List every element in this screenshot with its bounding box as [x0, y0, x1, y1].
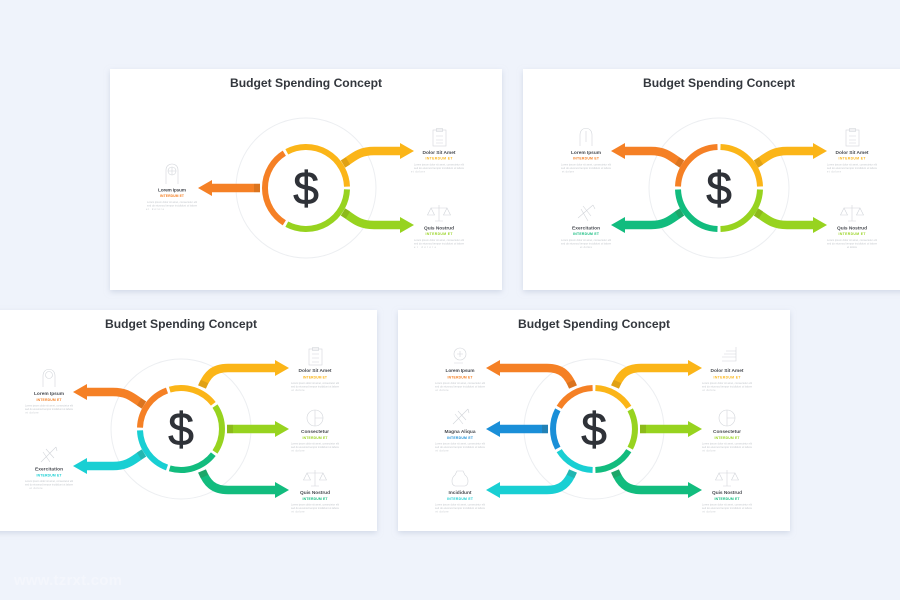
- icon: rocket: [578, 205, 595, 221]
- text block: bottom right: et dolore: [292, 510, 305, 514]
- text block: top right: sed do eiusmod tempor incididunt ut labore: [702, 386, 753, 388]
- text block: bottom right: INTERDUM ET: [426, 232, 453, 236]
- icon: rocket: [453, 409, 469, 424]
- text block: bottom right: Lorem ipsum dolor sit amet, consectetur elit: [702, 504, 752, 506]
- text block: top right: sed do eiusmod tempor incididunt ut labore: [414, 167, 465, 170]
- text block: top right: [702, 368, 753, 392]
- heading: Budget Spending Concept: [230, 76, 382, 90]
- text block: left: et dolore: [146, 208, 165, 211]
- text block: top right: Lorem ipsum dolor sit amet, consectetur elit: [414, 164, 464, 166]
- text block: top left: Lorem Ipsum: [34, 391, 64, 397]
- text block: middle right: INTERDUM ET: [302, 436, 328, 440]
- text block: bottom left: Lorem ipsum dolor sit amet, consectetur elit: [561, 239, 611, 242]
- arrow: green: [202, 471, 289, 498]
- arrow: lime: [227, 421, 289, 437]
- heading: Budget Spending Concept: [518, 317, 670, 331]
- text block: left: Lorem Ipsum: [158, 188, 186, 194]
- text block: middle right: Lorem ipsum dolor sit amet, consectetur elit: [291, 442, 339, 446]
- text block: bottom right: INTERDUM ET: [302, 497, 328, 501]
- text block: bottom left: sed do eiusmod tempor incididunt ut labore: [25, 484, 74, 486]
- text block: top right: INTERDUM ET: [714, 376, 741, 380]
- panel: three-arrow concept: [110, 69, 502, 290]
- text block: middle right: et dolore: [292, 450, 305, 452]
- text block: top right: Dolor Sit Amet: [422, 150, 456, 156]
- ring: [553, 388, 635, 470]
- icon: clipboard: [309, 348, 322, 365]
- text block: bottom left: et dolore: [30, 487, 43, 490]
- arrow: yellow: [756, 143, 827, 164]
- arrow: teal: [611, 212, 682, 233]
- text block: bottom right: sed do eiusmod tempor incididunt ut labore: [291, 507, 340, 510]
- text block: top right: Dolor Sit Amet: [298, 368, 332, 374]
- icon: head: [580, 128, 592, 146]
- arrow: orange: [73, 384, 144, 405]
- text block: top left: [561, 150, 612, 174]
- icon: head: [454, 348, 466, 363]
- text block: bottom right: Lorem ipsum dolor sit amet, consectetur elit: [827, 239, 877, 242]
- watermark: www.tzrxt.com: [13, 572, 122, 589]
- text block: middle right: [291, 429, 340, 452]
- text block: top left: Lorem ipsum dolor sit amet, consectetur elit: [435, 382, 485, 385]
- arrow: lime: [640, 421, 702, 437]
- icon: rocket: [41, 447, 57, 462]
- text block: top right: Dolor Sit Amet: [710, 368, 744, 374]
- arrow: yellow: [343, 143, 414, 164]
- text block: bottom left: Incididunt: [448, 490, 472, 496]
- text block: bottom right: sed do eiusmod tempor incididunt ut labore: [414, 242, 465, 246]
- text block: top left: INTERDUM ET: [573, 156, 600, 160]
- text block: top right: INTERDUM ET: [303, 376, 328, 380]
- icon: scales: [428, 205, 450, 221]
- text block: bottom right: Lorem ipsum dolor sit amet, consectetur elit: [414, 239, 464, 242]
- icon: clipboard: [433, 128, 446, 146]
- arrow: orange: [198, 180, 260, 196]
- dollar icon: $: [293, 162, 319, 214]
- ring: [265, 147, 347, 229]
- text block: top left: INTERDUM ET: [448, 376, 473, 380]
- text block: middle right: INTERDUM ET: [714, 436, 740, 440]
- text block: top right: sed do eiusmod tempor incididunt ut labore: [827, 167, 878, 170]
- ring: [678, 147, 760, 229]
- text block: left: [146, 188, 198, 211]
- text block: top right: et dolore: [702, 389, 716, 392]
- text block: top left: et dolore: [436, 389, 449, 392]
- icon: clipboard: [846, 128, 859, 146]
- text block: top right: Lorem ipsum dolor sit amet, consectetur elit: [827, 164, 877, 166]
- arrow: yellow: [615, 360, 702, 387]
- text block: top right: INTERDUM ET: [838, 156, 866, 160]
- text block: bottom right: INTERDUM ET: [838, 232, 866, 236]
- arrow: green: [343, 212, 414, 233]
- text block: bottom left: Exercitation: [35, 466, 63, 472]
- text block: top left: et dolore: [562, 170, 575, 174]
- text block: bottom right: et dolore: [414, 246, 437, 249]
- text block: bottom left: INTERDUM ET: [447, 497, 474, 501]
- text block: bottom left: [435, 490, 486, 514]
- text block: bottom left: [25, 466, 74, 490]
- arrow: orange: [611, 143, 682, 164]
- text block: bottom right: sed do eiusmod tempor incididunt ut labore: [702, 507, 753, 510]
- text block: top right: et dolore: [411, 170, 426, 174]
- panel: five-arrow concept: [0, 310, 377, 531]
- icon: head: [43, 369, 55, 387]
- text block: bottom right: et dolore: [847, 246, 858, 249]
- text block: bottom left: sed do eiusmod tempor incididunt ut labore: [561, 242, 612, 246]
- text block: top left: Lorem Ipsum: [571, 150, 601, 156]
- text block: top right: Lorem ipsum dolor sit amet, consectetur elit: [702, 382, 752, 385]
- text block: middle left: et dolore: [436, 450, 449, 452]
- icon: pie chart: [719, 410, 735, 426]
- text block: middle right: sed do eiusmod tempor incididunt ut labore: [291, 446, 340, 449]
- text block: bottom right: [414, 226, 465, 249]
- dollar icon: $: [168, 403, 194, 455]
- text block: middle left: Magna Aliqua: [444, 429, 476, 435]
- icon: money bag: [452, 471, 468, 486]
- heading: Budget Spending Concept: [643, 76, 795, 90]
- text block: middle left: Lorem ipsum dolor sit amet, consectetur elit: [435, 442, 485, 446]
- text block: bottom right: [827, 226, 878, 249]
- text block: top left: Lorem ipsum dolor sit amet, consectetur elit: [25, 404, 73, 408]
- text block: top right: et dolore: [292, 389, 305, 392]
- text block: bottom right: Quis Nostrud: [837, 226, 867, 232]
- text block: middle right: sed do eiusmod tempor incididunt ut labore: [702, 446, 753, 449]
- text block: top left: [435, 368, 486, 392]
- text block: top left: sed do eiusmod tempor incididunt ut labore: [561, 167, 612, 170]
- text block: middle right: Lorem ipsum dolor sit amet, consectetur elit: [702, 442, 752, 446]
- ring: [140, 388, 222, 470]
- arrow: green: [615, 471, 702, 498]
- arrow: blue: [486, 421, 548, 437]
- arrow: green: [756, 212, 827, 233]
- text block: top left: et dolore: [26, 412, 39, 414]
- text block: middle right: Consectetur: [301, 429, 329, 435]
- text block: bottom right: Quis Nostrud: [712, 490, 742, 496]
- text block: left: sed do eiusmod tempor incididunt ut labore: [147, 204, 198, 208]
- text block: bottom right: [291, 490, 340, 514]
- text block: top left: INTERDUM ET: [36, 398, 62, 402]
- text block: top right: INTERDUM ET: [426, 156, 453, 160]
- panel: six-arrow concept: [398, 310, 790, 531]
- text block: bottom left: et dolore: [580, 246, 593, 249]
- text block: top left: sed do eiusmod tempor incididunt ut labore: [435, 386, 486, 388]
- icon: scales: [840, 205, 864, 221]
- text block: bottom right: Quis Nostrud: [300, 490, 330, 496]
- text block: middle right: [702, 429, 753, 452]
- text block: top left: sed do eiusmod tempor incididunt ut labore: [25, 408, 74, 411]
- text block: middle left: INTERDUM ET: [447, 436, 474, 440]
- text block: top left: Lorem Ipsum: [446, 368, 474, 374]
- dollar icon: $: [581, 403, 607, 455]
- text block: bottom left: [561, 226, 612, 249]
- text block: top right: [411, 150, 465, 174]
- icon: head: [166, 164, 178, 184]
- text block: middle left: sed do eiusmod tempor incididunt ut labore: [435, 446, 486, 449]
- text block: bottom left: et dolore: [436, 510, 449, 514]
- text block: bottom right: Lorem ipsum dolor sit amet, consectetur elit: [291, 504, 339, 506]
- text block: bottom right: INTERDUM ET: [714, 497, 740, 501]
- text block: middle right: et dolore: [702, 450, 716, 452]
- text block: bottom left: sed do eiusmod tempor incididunt ut labore: [435, 507, 486, 510]
- dollar icon: $: [706, 162, 732, 214]
- text block: left: Lorem ipsum dolor sit amet, consectetur elit: [147, 201, 197, 204]
- text block: top right: Dolor Sit Amet: [836, 150, 869, 156]
- panel: four-arrow concept: [523, 69, 900, 290]
- text block: bottom right: Quis Nostrud: [424, 226, 454, 232]
- text block: middle right: Consectetur: [713, 429, 741, 435]
- text block: bottom right: sed do eiusmod tempor incididunt ut labore: [827, 242, 878, 246]
- text block: bottom right: [702, 490, 753, 514]
- icon: scales: [304, 470, 326, 486]
- text block: top left: [25, 391, 74, 414]
- text block: bottom left: Exercitation: [572, 226, 600, 232]
- text block: top right: Lorem ipsum dolor sit amet, consectetur elit: [291, 382, 339, 385]
- text block: top right: [291, 368, 340, 392]
- text block: top right: et dolore: [827, 170, 842, 174]
- text block: top left: Lorem ipsum dolor sit amet, consectetur elit: [561, 164, 611, 166]
- text block: left: INTERDUM ET: [160, 194, 185, 198]
- text block: bottom right: et dolore: [702, 510, 716, 514]
- icon: document: [722, 347, 736, 361]
- text block: top right: [827, 150, 878, 174]
- heading: Budget Spending Concept: [105, 317, 257, 331]
- arrow: cyan: [73, 453, 144, 474]
- text block: bottom left: INTERDUM ET: [573, 232, 600, 236]
- arrow: orange: [486, 360, 573, 387]
- text block: middle left: [435, 429, 486, 452]
- text block: bottom left: Lorem ipsum dolor sit amet, consectetur elit: [435, 504, 485, 506]
- text block: bottom left: Lorem ipsum dolor sit amet, consectetur elit: [25, 480, 73, 483]
- arrow: cyan: [486, 471, 573, 498]
- arrow: yellow: [202, 360, 289, 387]
- text block: top right: sed do eiusmod tempor incididunt ut labore: [291, 386, 340, 388]
- text block: bottom left: INTERDUM ET: [36, 474, 62, 478]
- icon: pie chart: [307, 410, 323, 426]
- icon: scales: [716, 470, 738, 486]
